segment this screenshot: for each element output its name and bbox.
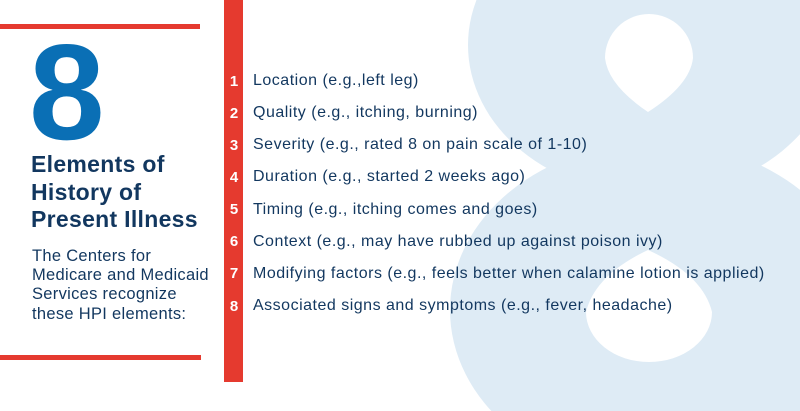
list of elements: 7 — [230, 265, 238, 282]
big number 8: 8 — [29, 16, 105, 168]
list of elements: 4 — [230, 169, 238, 186]
description: The Centers for — [32, 247, 151, 265]
list of elements: Associated signs and symptoms (e.g., fever, headache) — [253, 297, 673, 314]
list of elements: 2 — [230, 105, 238, 122]
list of elements: Context (e.g., may have rubbed up against poison ivy) — [253, 233, 663, 250]
red vertical bar — [224, 0, 243, 382]
description: these HPI elements: — [32, 305, 186, 323]
list of elements: Modifying factors (e.g., feels better when calamine lotion is applied) — [253, 265, 765, 282]
title: History of — [31, 178, 141, 204]
list of elements: Quality (e.g., itching, burning) — [253, 104, 478, 121]
list of elements: Duration (e.g., started 2 weeks ago) — [253, 168, 525, 185]
list of elements: 1 — [230, 73, 238, 90]
title: Elements of — [31, 151, 165, 177]
list of elements: 5 — [230, 201, 238, 218]
list of elements: Location (e.g.,left leg) — [253, 72, 419, 89]
title — [31, 151, 198, 232]
list of elements: Severity (e.g., rated 8 on pain scale of 1-10) — [253, 136, 587, 153]
list of elements: 6 — [230, 233, 238, 250]
list of elements: 8 — [230, 298, 238, 315]
description: Medicare and Medicaid — [32, 266, 209, 284]
top red line — [0, 24, 200, 29]
description — [32, 247, 209, 323]
title: Present Illness — [31, 206, 198, 232]
list of elements: 3 — [230, 137, 238, 154]
description: Services recognize — [32, 285, 177, 303]
list of elements: Timing (e.g., itching comes and goes) — [253, 201, 538, 218]
bottom red line — [0, 355, 201, 360]
